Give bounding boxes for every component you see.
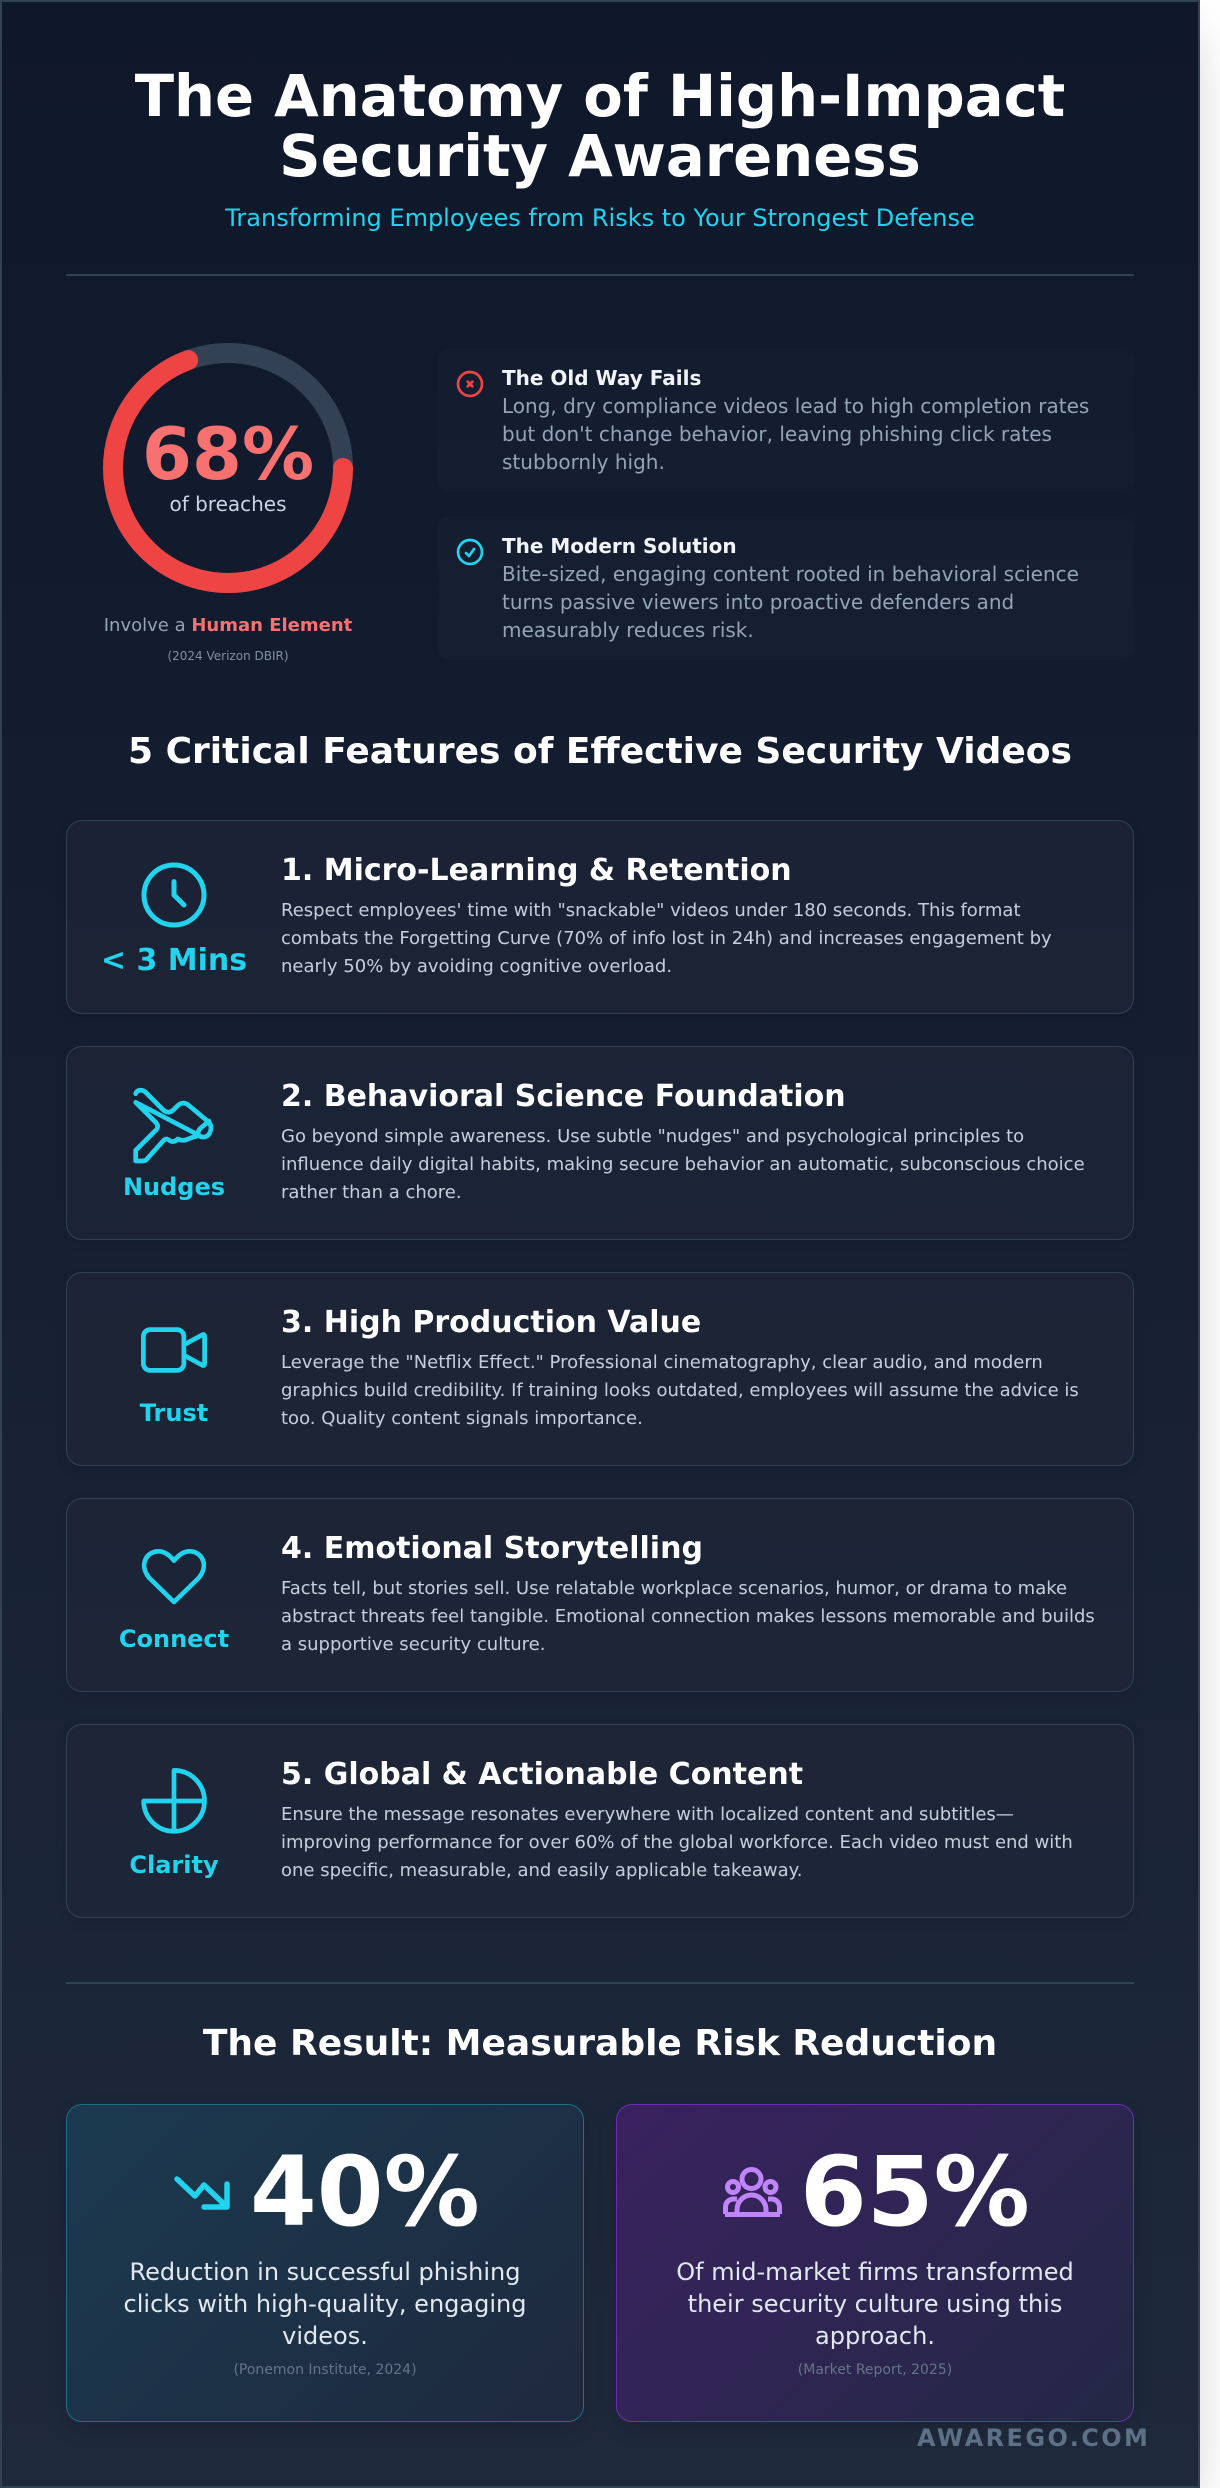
label: connect: Connect — [119, 1625, 229, 1653]
label: nudges: Nudges — [123, 1173, 225, 1201]
panel: the old way fails — [438, 348, 1134, 492]
text: feature 5: Ensure the message resonates everywhere with localized content and subtitles— — [281, 1804, 1014, 1825]
value: 65 percent: 65% — [800, 2136, 1030, 2248]
icon: people group — [723, 2167, 782, 2217]
panel: feature 4 — [66, 1498, 1134, 1692]
text: modern solution: turns passive viewers into proactive defenders and — [502, 590, 1014, 614]
panel: feature 5 — [66, 1724, 1134, 1918]
label: clarity: Clarity — [129, 1851, 219, 1879]
text: culture transformation: their security culture using this — [688, 2290, 1062, 2318]
icon: video camera — [141, 1327, 207, 1373]
text: feature 3: Leverage the "Netflix Effect." Professional cinematography, clear audio, and modern — [281, 1352, 1043, 1373]
text: modern solution — [502, 562, 1079, 642]
text: feature 2 — [281, 1126, 1085, 1203]
label: under 3 minutes: < 3 Mins — [101, 943, 247, 978]
subtitle: Transforming Employees from Risks to Your Strongest Defense — [225, 204, 975, 232]
heading: feature 3: 3. High Production Value — [281, 1305, 701, 1340]
icon: check circle — [456, 538, 484, 566]
value: 40 percent: 40% — [250, 2136, 480, 2248]
human element statement: Involve a Human Element — [104, 615, 352, 636]
text: feature 2: influence daily digital habits, making secure behavior an automatic, subconscious choice — [281, 1154, 1085, 1175]
icon: heart — [142, 1549, 206, 1604]
icon: trending down arrow — [174, 2176, 230, 2210]
panel: the modern solution — [438, 516, 1134, 660]
section heading: critical features: 5 Critical Features of Effective Security Videos — [128, 731, 1072, 772]
source note: (2024 Verizon DBIR) — [167, 649, 289, 663]
text: feature 1: combats the Forgetting Curve (70% of info lost in 24h) and increases engagement by — [281, 928, 1052, 949]
label: trust: Trust — [140, 1399, 208, 1427]
text: feature 3: too. Quality content signals importance. — [281, 1408, 643, 1429]
panel: feature 2 — [66, 1046, 1134, 1240]
heading: feature 2: 2. Behavioral Science Foundation — [281, 1079, 846, 1114]
text: feature 5 — [281, 1804, 1073, 1881]
text: old way: stubbornly high. — [502, 450, 665, 474]
watermark: AWAREGO.COM — [917, 2424, 1150, 2452]
text: feature 1 — [281, 900, 1052, 977]
text: feature 4: Facts tell, but stories sell. Use relatable workplace scenarios, humor, or drama to make — [281, 1578, 1067, 1599]
text: feature 1: nearly 50% by avoiding cognitive overload. — [281, 956, 672, 977]
text: modern solution: Bite-sized, engaging content rooted in behavioral science — [502, 562, 1079, 586]
panel: feature 1 — [66, 820, 1134, 1014]
text: feature 5: improving performance for over 60% of the global workforce. Each video must end with — [281, 1832, 1073, 1853]
text: feature 2: rather than a chore. — [281, 1182, 462, 1203]
panel: 68 percent statistic — [103, 343, 353, 663]
text: feature 1: Respect employees' time with "snackable" videos under 180 seconds. This format — [281, 900, 1021, 921]
text: old way: Long, dry compliance videos lead to high completion rates — [502, 394, 1089, 418]
source: ponemon: (Ponemon Institute, 2024) — [233, 2362, 417, 2378]
text: feature 5: one specific, measurable, and easily applicable takeaway. — [281, 1860, 802, 1881]
icon: nudge key — [133, 1088, 214, 1164]
text: phishing reduction — [124, 2258, 526, 2350]
text: phishing reduction: Reduction in successful phishing — [130, 2258, 520, 2286]
text: culture transformation: approach. — [815, 2322, 935, 2350]
panel: 65 percent stat — [616, 2104, 1134, 2422]
source: market report: (Market Report, 2025) — [798, 2362, 952, 2378]
text: modern solution: measurably reduces risk. — [502, 618, 754, 642]
text: culture transformation — [676, 2258, 1074, 2350]
heading: feature 5: 5. Global & Actionable Content — [281, 1757, 803, 1792]
donut caption: of breaches — [169, 492, 287, 516]
title: The Anatomy of High-Impact — [135, 63, 1065, 130]
text: phishing reduction: videos. — [282, 2322, 368, 2350]
icon: clock — [142, 862, 206, 928]
heading: old way: The Old Way Fails — [502, 366, 701, 390]
text: feature 4: a supportive security culture. — [281, 1634, 545, 1655]
title: Security Awareness — [279, 123, 921, 190]
text: phishing reduction: clicks with high-quality, engaging — [124, 2290, 526, 2318]
donut value: 68% — [142, 412, 314, 496]
heading: feature 4: 4. Emotional Storytelling — [281, 1531, 703, 1566]
text: feature 2: Go beyond simple awareness. Use subtle "nudges" and psychological principles to — [281, 1126, 1024, 1147]
section heading: result: The Result: Measurable Risk Reduction — [203, 2023, 997, 2064]
text: old way: but don't change behavior, leaving phishing click rates — [502, 422, 1052, 446]
text: feature 3: graphics build credibility. If training looks outdated, employees will assume the advice is — [281, 1380, 1079, 1401]
text: feature 3 — [281, 1352, 1079, 1429]
icon: x circle — [456, 370, 484, 398]
text: feature 4 — [281, 1578, 1095, 1655]
text: culture transformation: Of mid-market firms transformed — [676, 2258, 1074, 2286]
panel: 40 percent stat — [66, 2104, 584, 2422]
text: feature 4: abstract threats feel tangible. Emotional connection makes lessons memorable and builds — [281, 1606, 1095, 1627]
title — [135, 63, 1065, 190]
heading: modern solution: The Modern Solution — [502, 534, 737, 558]
icon: clarity quarter circle — [141, 1768, 207, 1834]
donut chart: 68 percent — [103, 343, 353, 593]
panel: feature 3 — [66, 1272, 1134, 1466]
text: old way — [502, 394, 1089, 474]
heading: feature 1: 1. Micro-Learning & Retention — [281, 853, 792, 888]
